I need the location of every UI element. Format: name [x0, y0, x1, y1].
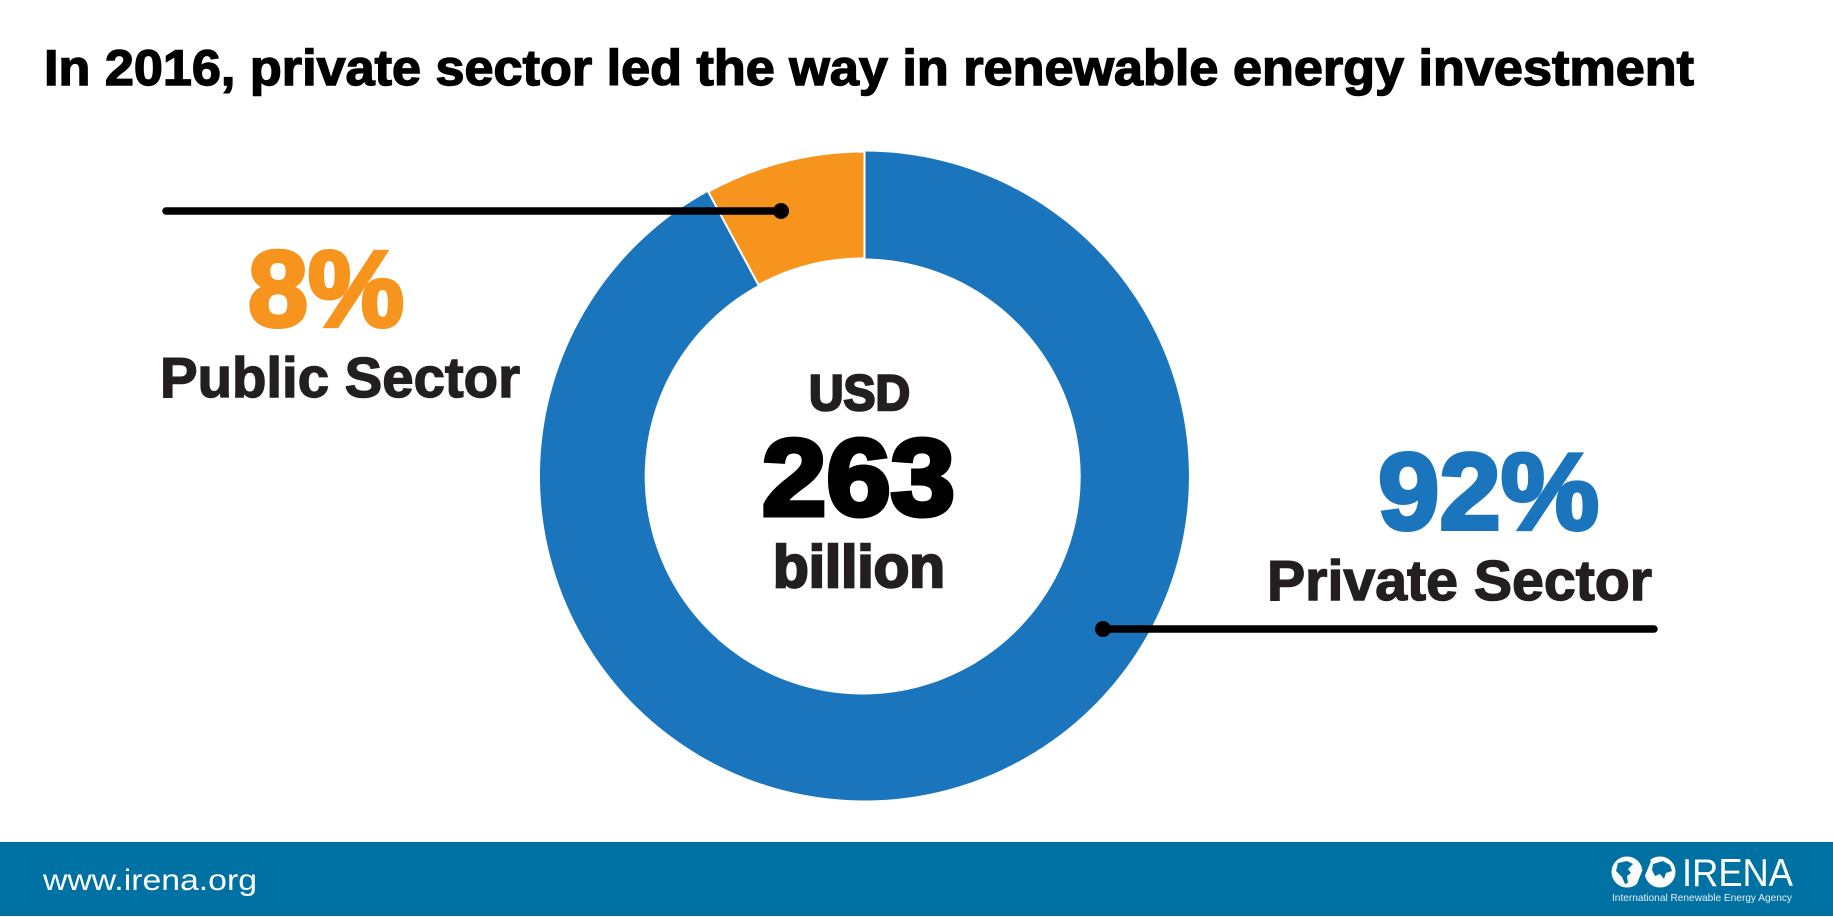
- public sector percentage: 8%: [248, 228, 404, 349]
- currency: USD: [809, 365, 910, 421]
- footer band: [0, 842, 1833, 916]
- website: www.irena.org: [42, 864, 257, 897]
- icon: infinity globes: [1612, 856, 1676, 888]
- private sector label: Private Sector: [1267, 549, 1652, 613]
- donut chart: [540, 151, 1189, 801]
- unit: billion: [773, 534, 945, 600]
- segment: public sector 8%: [708, 151, 864, 285]
- logo: IRENA: [1612, 852, 1793, 904]
- public sector label: Public Sector: [160, 346, 520, 410]
- wordmark: IRENA: [1682, 852, 1793, 895]
- amount: 263: [762, 417, 955, 539]
- agency name: International Renewable Energy Agency: [1612, 892, 1793, 904]
- leader line: private sector: [1095, 621, 1654, 637]
- title: In 2016, private sector led the way in renewable energy investment: [44, 40, 1694, 96]
- segment: private sector 92%: [540, 152, 1189, 801]
- center total: [762, 365, 955, 600]
- private sector percentage: 92%: [1378, 431, 1599, 553]
- leader line: public sector: [166, 203, 789, 219]
